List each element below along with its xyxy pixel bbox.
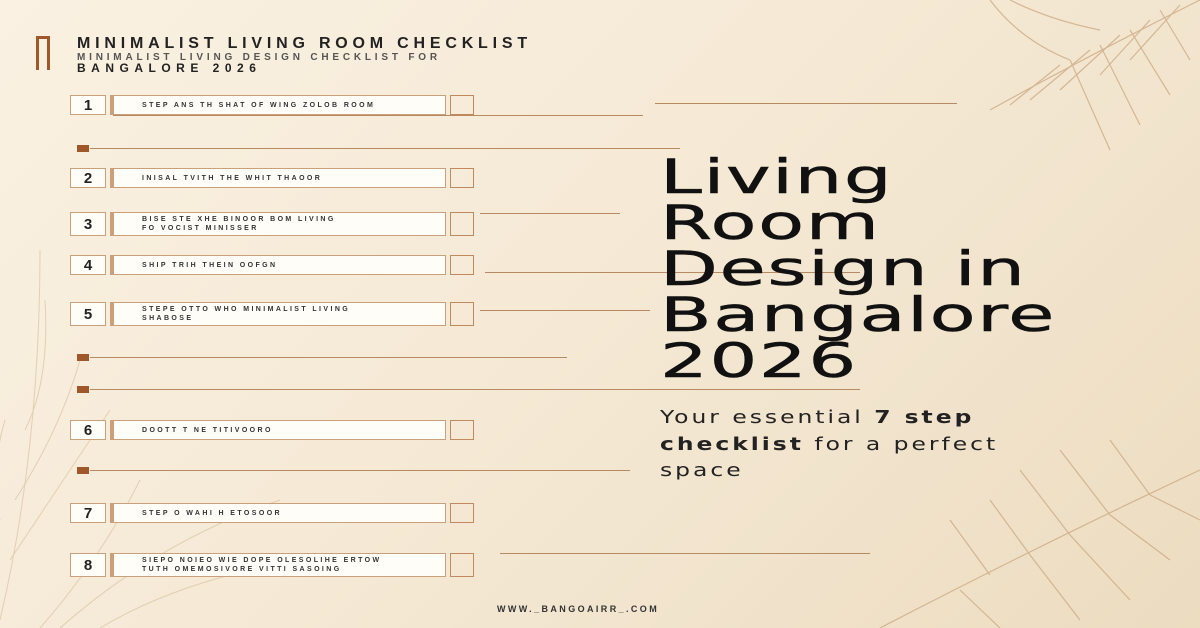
text: SHIP TRIH THEIN OOFGN xyxy=(142,262,277,268)
step 1 xyxy=(70,95,474,115)
step 8 xyxy=(70,553,474,577)
text: 1 xyxy=(84,96,92,114)
text: BISE STE XHE BINOOR BOM LIVING xyxy=(142,216,336,223)
step 4 xyxy=(70,255,474,275)
main heading: Design in xyxy=(660,242,1026,297)
text: 8 xyxy=(84,556,92,574)
text: STEP ANS TH SHAT OF WING ZOLOB ROOM xyxy=(142,102,375,108)
text: 7 xyxy=(84,504,92,522)
main heading: Room xyxy=(660,196,881,251)
text: STEPE OTTO WHO MINIMALIST LIVING xyxy=(142,306,350,313)
text: DOOTT T NE TITIVOORO xyxy=(142,426,273,434)
main heading xyxy=(660,150,1056,389)
subtitle xyxy=(660,407,998,481)
text: 6 xyxy=(84,422,92,438)
subtitle: space xyxy=(660,460,744,481)
icon: bracket xyxy=(36,36,50,70)
title block xyxy=(36,35,532,75)
footer url: WWW._BANGOAIRR_.COM xyxy=(497,604,659,614)
main heading: Bangalore xyxy=(660,288,1056,343)
step 7 xyxy=(70,503,474,523)
lines xyxy=(655,103,957,104)
text: INISAL TVITH THE WHIT THAOOR xyxy=(142,174,322,182)
title block: MINIMALIST LIVING DESIGN CHECKLIST FOR xyxy=(77,52,441,63)
step 3 xyxy=(70,212,474,236)
text: SIEPO NOIEO WIE DOPE OLESOLIHE ERTOW xyxy=(142,557,382,564)
text: 4 xyxy=(84,256,92,274)
text: 5 xyxy=(84,306,92,322)
text: 2 xyxy=(84,170,92,186)
text: TUTH OMEMOSIVORE VITTI SASOING xyxy=(142,566,342,573)
subtitle: Your essential 7 step xyxy=(660,407,974,428)
main heading: Living xyxy=(660,150,893,205)
text: FO VOCIST MINISSER xyxy=(142,225,259,232)
step 6 xyxy=(70,420,474,440)
text: SHABOSE xyxy=(142,315,193,322)
title block: MINIMALIST LIVING ROOM CHECKLIST xyxy=(77,35,532,52)
step 5 xyxy=(70,302,474,326)
subtitle: checklist for a perfect xyxy=(660,434,998,454)
text: 3 xyxy=(84,216,92,232)
text: STEP O WAHI H ETOSOOR xyxy=(142,510,282,516)
title block: BANGALORE 2026 xyxy=(77,61,261,75)
step 2 xyxy=(70,168,474,188)
main heading: 2026 xyxy=(660,334,858,389)
